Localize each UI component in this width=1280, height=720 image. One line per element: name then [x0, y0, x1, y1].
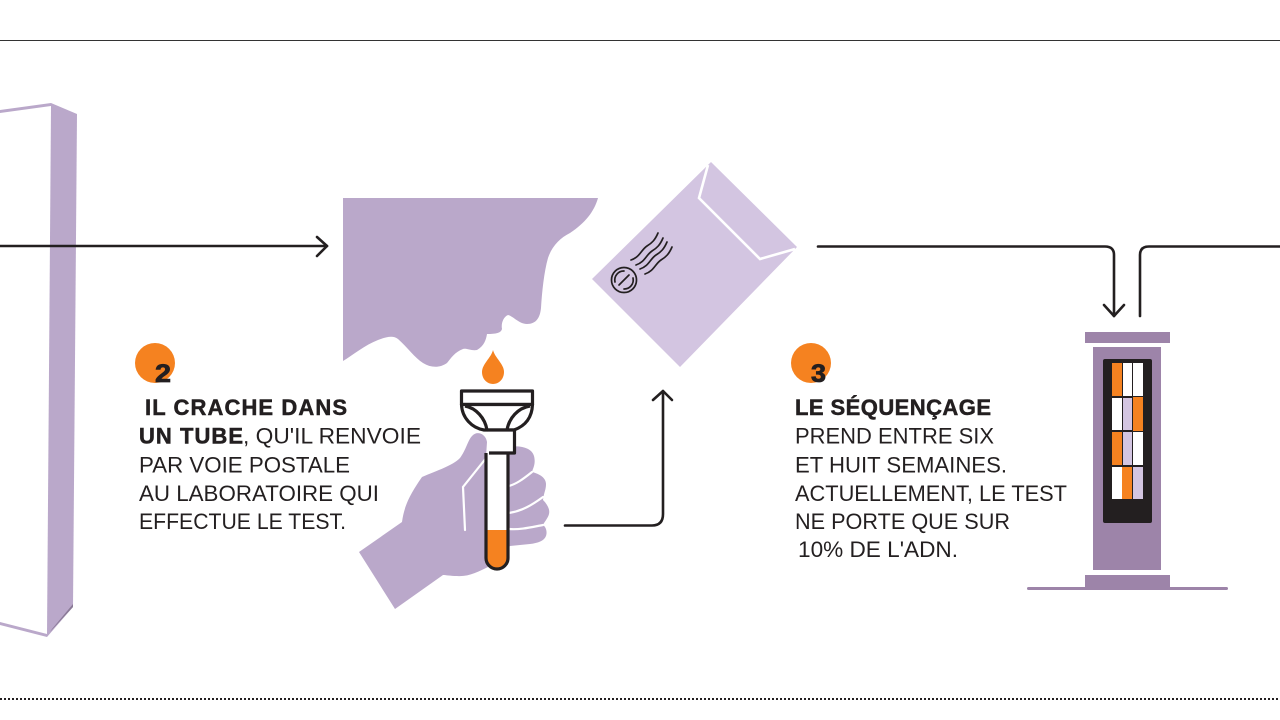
step 3 text block: ET HUIT SEMAINES. [795, 452, 1007, 478]
hand [359, 433, 549, 609]
finger gaps [463, 457, 543, 530]
step 2 number badge: 2 [155, 360, 171, 388]
step 2 text block: PAR VOIE POSTALE [139, 452, 350, 478]
tube cap and funnel [462, 391, 532, 569]
step 3 text block: NE PORTE QUE SUR [795, 509, 1010, 534]
icon: orange drop [482, 350, 504, 384]
step 3 text block: PREND ENTRE SIX [795, 424, 994, 448]
postmark waves [631, 233, 672, 274]
step 2 text block [139, 395, 421, 534]
step 2 text block: UN TUBE [139, 424, 243, 448]
panel: left pillar [0, 103, 77, 637]
step 3 text block [795, 395, 1067, 562]
envelope flap [699, 165, 795, 259]
sequencer screen [1103, 359, 1152, 523]
step 3 text block: LE SÉQUENÇAGE [795, 395, 991, 420]
tube body [486, 453, 508, 569]
step 2 text block: , QU'IL RENVOIE [243, 424, 421, 448]
step 2 number badge [135, 343, 175, 388]
icon: envelope [592, 162, 797, 367]
step 2 text block: IL CRACHE DANS [145, 395, 347, 420]
arrow: tube to envelope [565, 391, 672, 526]
step 3 text block: 10% DE L'ADN. [798, 537, 958, 562]
icon: head in profile [343, 198, 598, 367]
arrow: envelope to sequencer [818, 246, 1124, 316]
tube liquid [486, 530, 508, 569]
postmark stamp [612, 268, 636, 292]
step 2 text block: EFFECTUE LE TEST. [139, 509, 346, 534]
arrow: sequencer onward [1140, 246, 1280, 316]
icon: hand holding tube [359, 391, 549, 609]
step 3 text block: ACTUELLEMENT, LE TEST [795, 481, 1067, 506]
step 2 text block: AU LABORATOIRE QUI [139, 481, 379, 506]
icon: sequencer machine [1027, 332, 1228, 590]
step 3 number badge [791, 343, 831, 388]
step 3 number badge: 3 [811, 360, 826, 388]
arrow: pillar to head [0, 237, 327, 256]
